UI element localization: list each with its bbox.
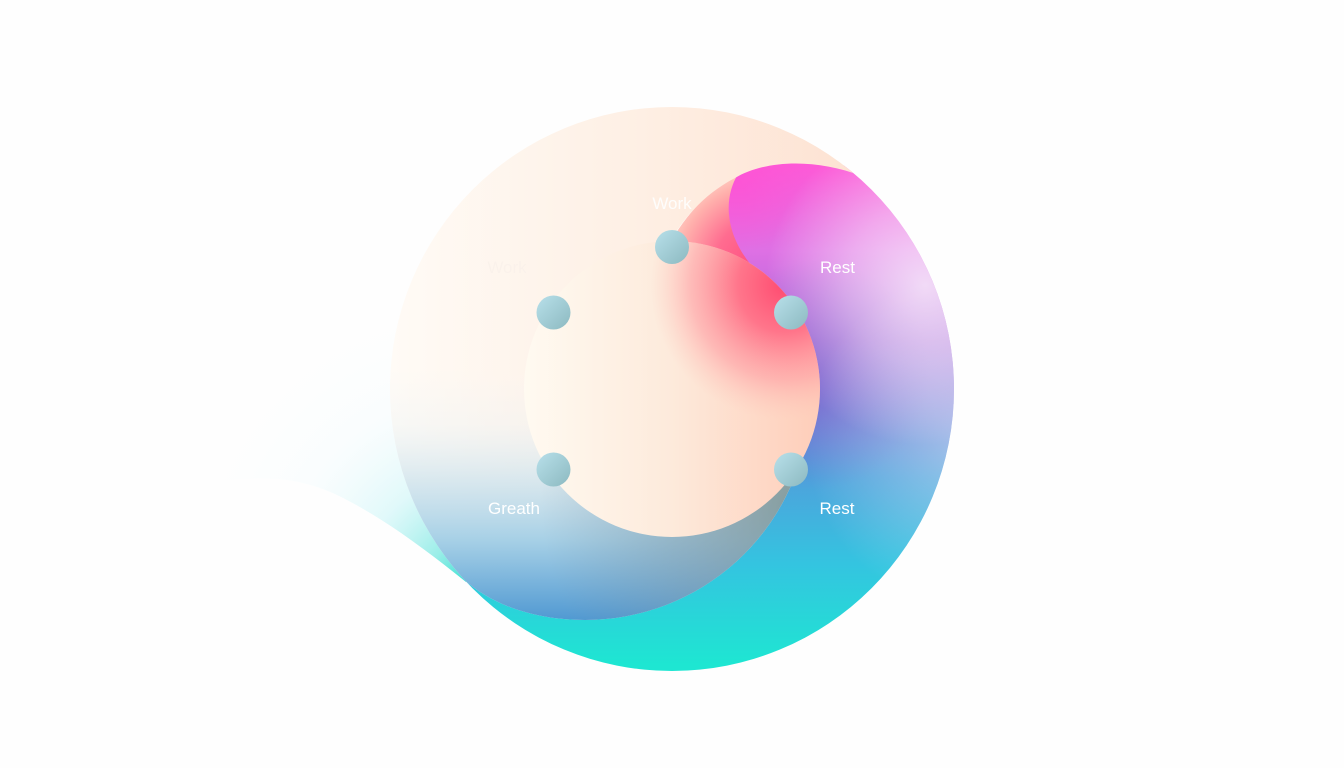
label: Work top: Work (652, 194, 692, 213)
pink wedge (678, 177, 750, 263)
circular cycle diagram (329, 107, 954, 671)
label: Rest lower: Rest (820, 499, 855, 518)
cream crescent (391, 107, 853, 620)
outer gradient ring (466, 164, 954, 671)
label: Work left: Work (487, 258, 527, 277)
node: top (655, 230, 689, 264)
label: Rest upper: Rest (820, 258, 855, 277)
teal tail wave (170, 320, 520, 582)
node: upper right (774, 296, 808, 330)
node: lower right (774, 452, 808, 486)
label: Greath: Greath (488, 499, 540, 518)
inner circle (524, 241, 820, 537)
node: lower left (536, 452, 570, 486)
node: upper left (536, 296, 570, 330)
